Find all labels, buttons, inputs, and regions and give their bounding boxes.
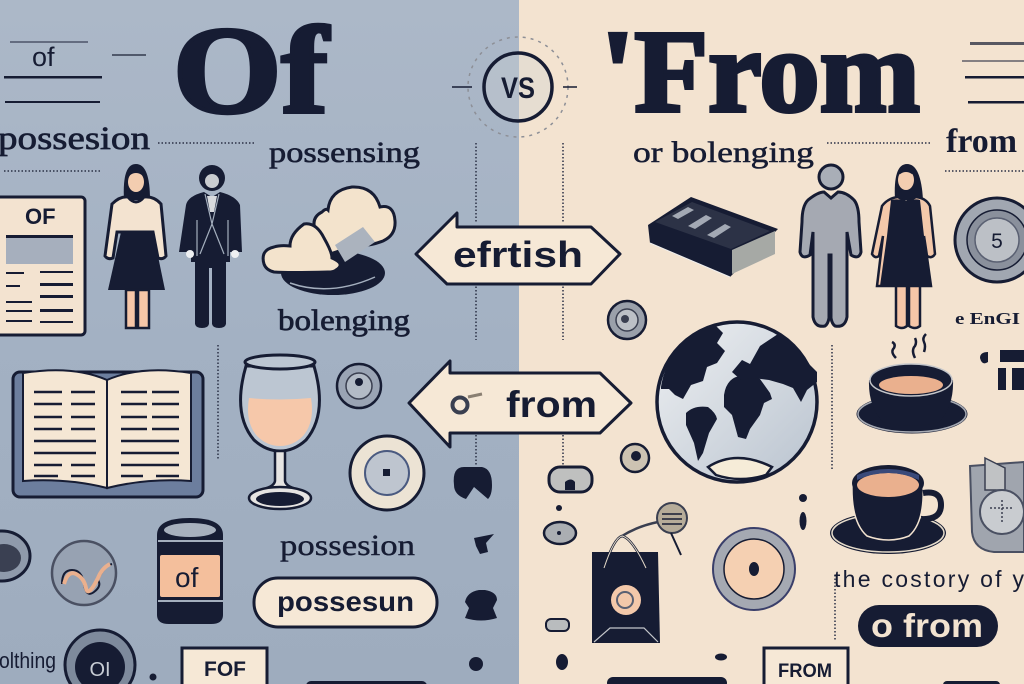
icon: vs badge [452,37,577,137]
heading: possensing: possensing [269,136,420,169]
heading: or bolenging: or bolenging [633,136,814,169]
arrow: efrtish [416,213,620,284]
label: the costory of: the costory of y [834,566,1024,592]
icon: marks right [544,350,1024,670]
small label: of top left: of [32,42,55,72]
icon: woman left [105,164,166,328]
icon: small ring [608,301,646,339]
icon: wine glass [241,355,319,509]
icon: coffee cup [830,465,946,554]
icon: jar of: of [175,562,199,593]
icon: of document: OF [25,204,56,229]
bar: bottom right [607,677,727,684]
label pill: o from: o from [871,607,983,644]
icon: globe [657,322,817,482]
icon: woman right [872,164,935,328]
label pill: o from [858,605,998,647]
label: small text right: e EnGI [955,309,1020,328]
label box: fof [182,648,267,684]
icon: peach dial [713,528,795,610]
icon: bottom dial left [65,630,135,684]
label: bolenging: bolenging [278,304,410,337]
heading: from right: from [946,123,1017,160]
icon: steaming cup [856,334,968,434]
arrow: of from: from [506,384,597,425]
icon: dial top right: 5 [991,230,1003,253]
icon: marks [150,467,497,680]
arrow: of from [409,361,631,447]
label box: from: FROM [778,661,832,682]
icon: brick box [648,197,778,277]
label box: from [764,648,848,684]
small lines top right [962,42,1024,104]
bar: bottom center [306,681,427,684]
panel: left background [0,0,519,684]
icon: man right [800,165,861,326]
decorative dotted guides [4,143,1024,640]
icon: circle bottom left [0,531,116,605]
title: From: 'From [601,6,920,137]
icon: jar of [157,518,223,624]
label: olthing: olthing [0,648,56,673]
arrow: efrtish: efrtish [453,234,583,275]
title: Of: Of [173,2,330,139]
icon: open book [13,370,203,497]
label box: possesun [254,578,437,627]
icon: shopping bag [592,503,687,643]
icon: man left [179,165,242,328]
panel: right background [519,0,1024,684]
heading: possession left: possesion [0,121,150,157]
icon: small circles left [337,364,424,510]
icon: side gadget [970,458,1024,552]
bar: bottom far right [943,681,1000,684]
label: possesion middle: possesion [280,529,415,562]
label box: fof: FOF [204,658,246,681]
icon: vs badge: VS [501,72,535,105]
label box: possesun: possesun [277,586,414,617]
icon: of document [0,197,85,335]
icon: bottom dial left: OI [89,659,111,681]
icon: clouds on plate [263,187,395,295]
icon: dial top right [955,198,1024,282]
